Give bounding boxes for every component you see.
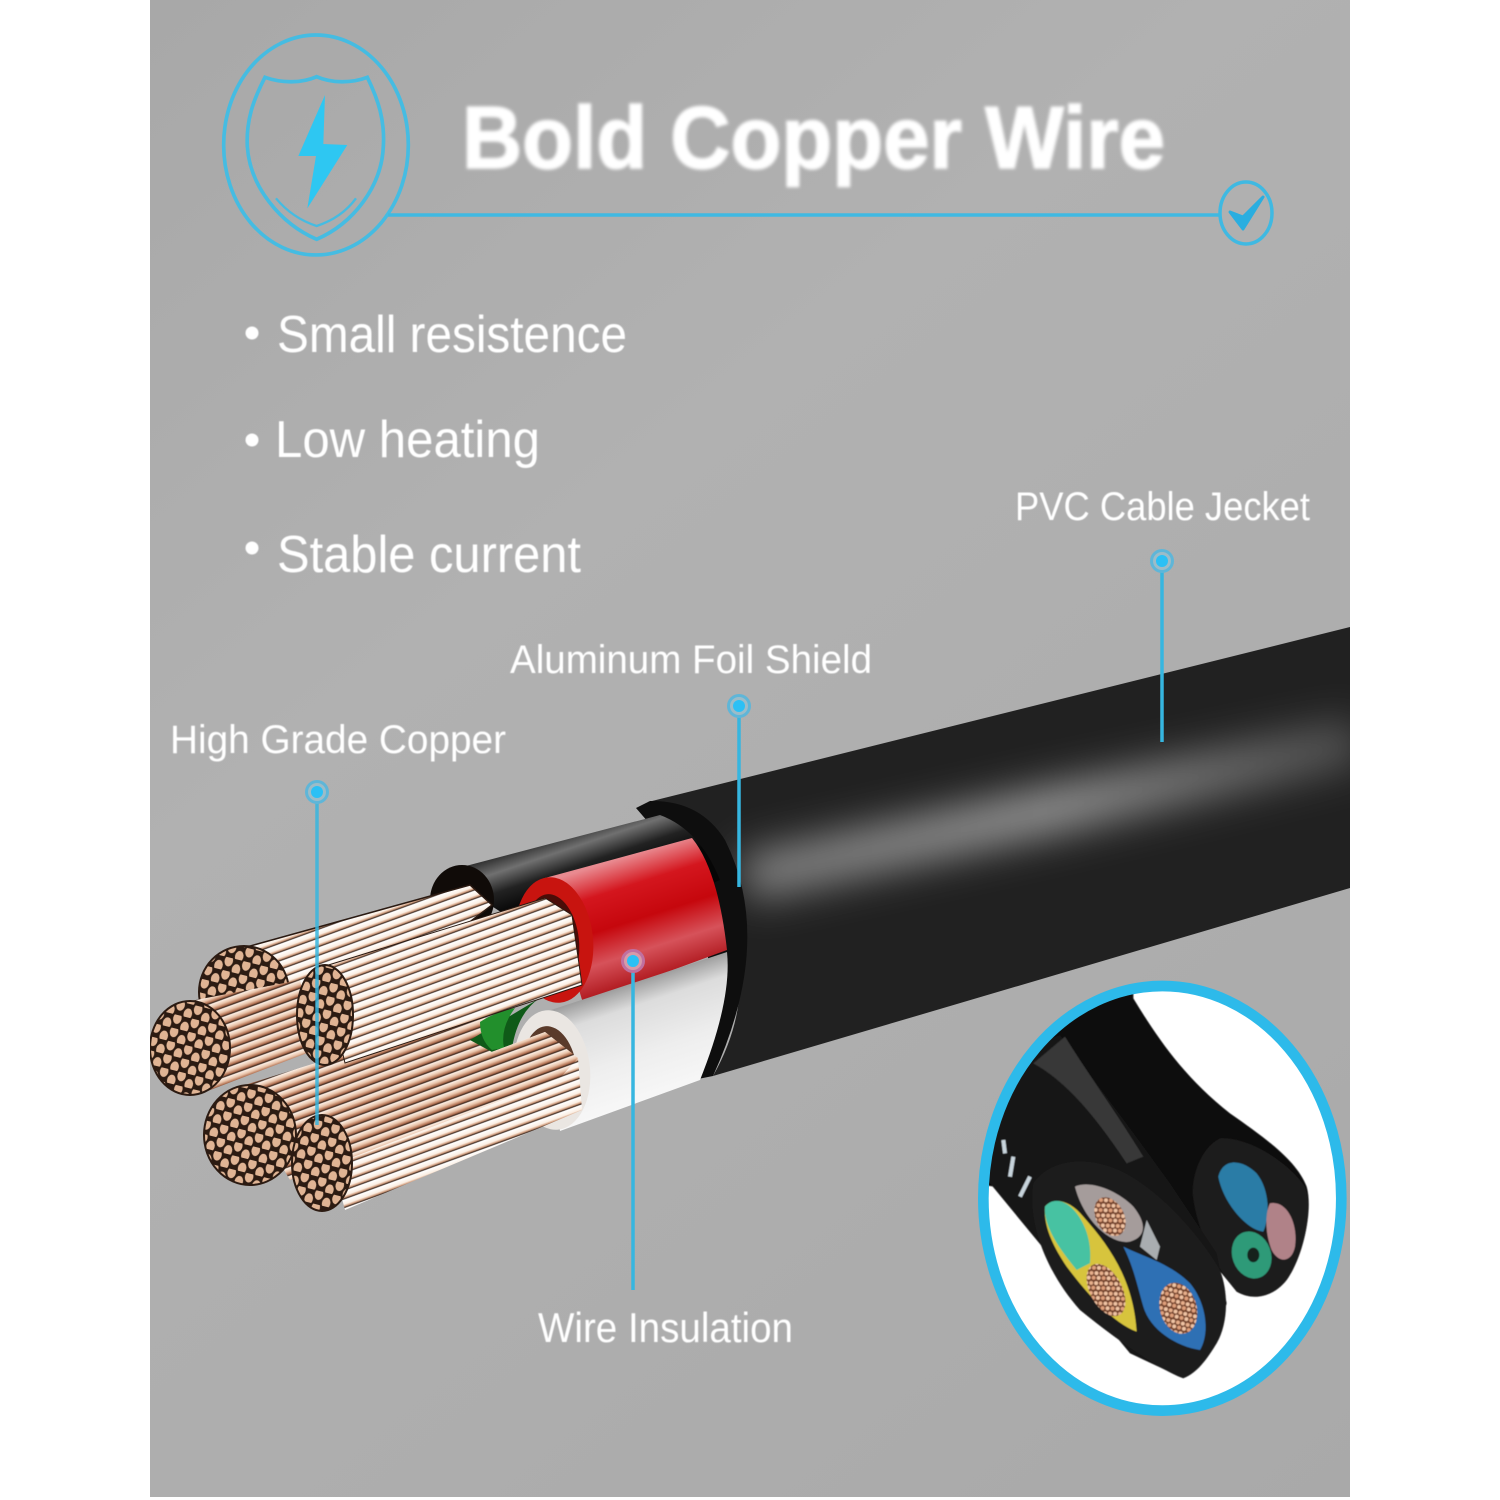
jacket sheen	[745, 741, 1360, 878]
black core	[430, 815, 693, 920]
right cable end face	[1193, 1138, 1308, 1297]
callout: PVC cable jacket: PVC Cable Jecket	[1015, 485, 1310, 529]
white core	[508, 952, 728, 1134]
callout: high grade copper: High Grade Copper	[170, 718, 506, 762]
copper strand bundle: top back	[198, 884, 493, 1000]
icon: check mark badge	[1220, 182, 1272, 244]
callout: PVC cable jacket	[1015, 485, 1310, 742]
callout: aluminum foil shield	[510, 638, 872, 887]
copper strand bundle: lower back	[204, 1012, 505, 1185]
title underline	[388, 213, 1220, 217]
benefits list	[246, 306, 627, 584]
benefit: small resistance: Small resistence	[277, 306, 627, 364]
infographic canvas	[150, 0, 1350, 1497]
cable illustration	[150, 627, 1360, 1211]
callout: wire insulation: Wire Insulation	[538, 1304, 793, 1351]
left cable end face	[1040, 1184, 1227, 1379]
copper strand bundle: far left	[150, 980, 315, 1095]
callout: wire insulation	[538, 949, 793, 1351]
icon: shield with lightning bolt	[224, 35, 408, 255]
right cable	[989, 994, 1310, 1294]
benefit: low heating: Low heating	[275, 411, 540, 469]
callout: high grade copper	[170, 718, 506, 1125]
copper strand bundle: upper front	[297, 898, 582, 1065]
copper strand bundle: lower front	[292, 1032, 582, 1211]
cable jacket	[648, 627, 1350, 1076]
benefit: stable current: Stable current	[277, 526, 582, 584]
green core	[470, 998, 540, 1052]
title: Bold Copper Wire	[462, 88, 1165, 187]
red core	[509, 838, 727, 1007]
background panel	[150, 0, 1350, 1497]
jacket rim	[636, 801, 747, 1080]
left cable	[970, 1035, 1227, 1378]
inset photo: cable cross section	[970, 970, 1341, 1411]
callout: aluminum foil shield: Aluminum Foil Shield	[510, 638, 872, 682]
